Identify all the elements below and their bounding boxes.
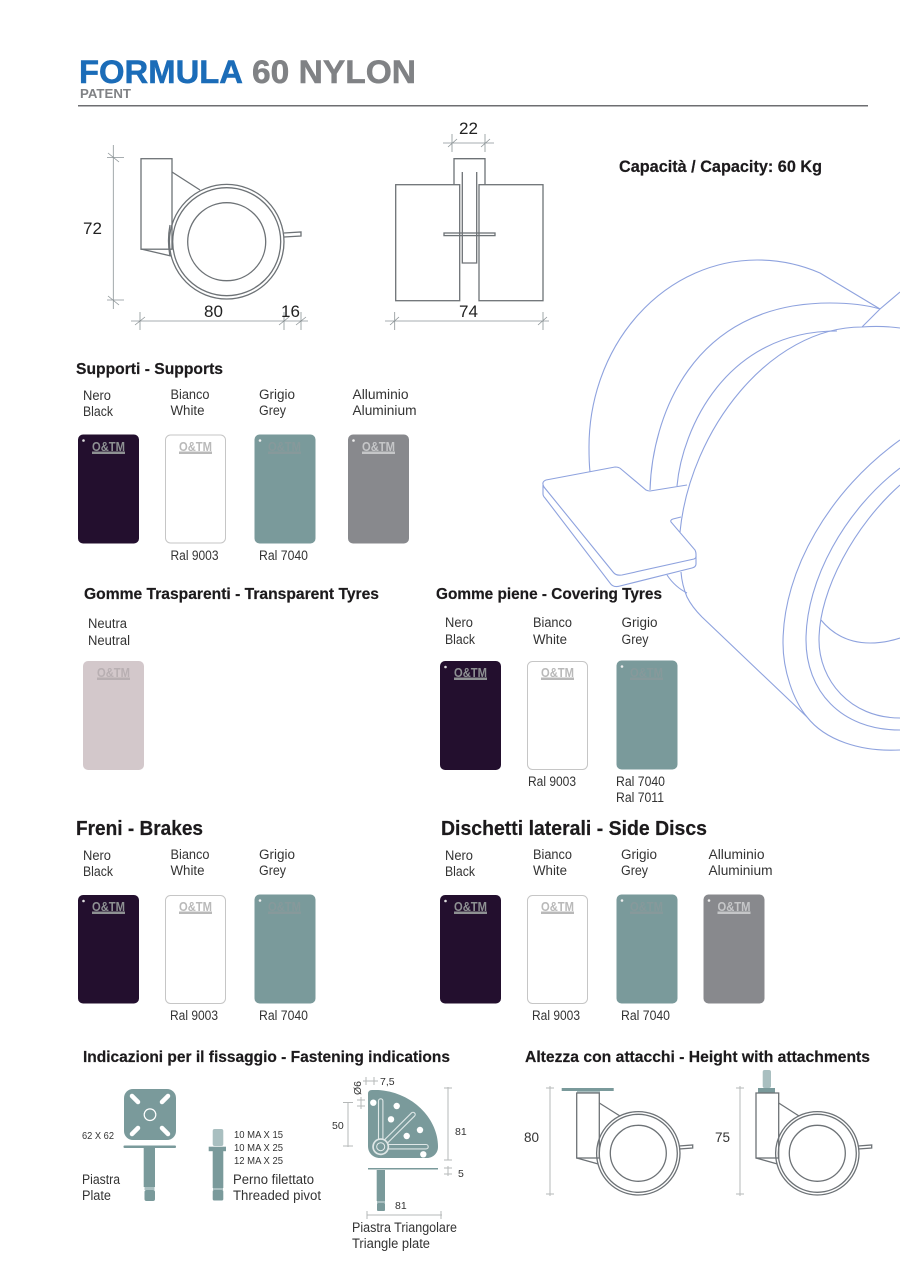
- swatch: discs grey: O&TM: [630, 900, 663, 914]
- swatch: discs aluminium: O&TM: [718, 900, 750, 914]
- ral codes: brakes: Ral 9003: [170, 1008, 218, 1023]
- colour labels: brakes: Black: [83, 864, 113, 879]
- swatch: supports aluminium: O&TM: [362, 440, 395, 454]
- colour labels: supports: Nero: [83, 388, 111, 403]
- swatch: supports white: [166, 435, 226, 543]
- colour labels: supports: [83, 387, 416, 419]
- heading: height with attachments: Altezza con attacchi - Height with attachments: [525, 1049, 870, 1066]
- colour labels: brakes: White: [170, 863, 204, 878]
- swatch: brakes grey: O&TM: [268, 900, 301, 914]
- colour labels: brakes: Bianco: [170, 847, 210, 862]
- swatch: brakes black: [78, 895, 139, 1004]
- colour labels: covering tyres: White: [533, 632, 567, 647]
- fastening: square plate: 62 X 62: [82, 1130, 114, 1142]
- title: PATENT: [80, 86, 131, 101]
- caster with threaded pivot, height 75: 75: [715, 1130, 730, 1145]
- colour labels: supports: Alluminio: [352, 387, 408, 402]
- colour labels: side discs: [445, 847, 772, 879]
- capacity text: Capacità / Capacity: 60 Kg: [619, 157, 822, 176]
- ral codes: supports: Ral 7040: [259, 548, 308, 563]
- swatch: covering black: [440, 661, 501, 770]
- colour labels: brakes: Grigio: [259, 847, 295, 862]
- fastening: square plate: [82, 1089, 176, 1203]
- colour labels: brakes: [83, 847, 295, 879]
- fastening: triangle plate: 50: [332, 1120, 344, 1132]
- caster with threaded pivot, height 75: [715, 1070, 872, 1196]
- colour labels: supports: White: [170, 403, 204, 418]
- colour labels: brakes: Nero: [83, 848, 111, 863]
- title: FORMULA: [79, 54, 243, 90]
- colour label: neutral: Neutral: [88, 633, 130, 648]
- colour labels: covering tyres: Black: [445, 632, 475, 647]
- diagram: front view with dimensions: 22: [459, 119, 478, 138]
- fastening: threaded pivot: 12 MA X 25: [234, 1155, 283, 1167]
- ral codes: side discs: [532, 1008, 670, 1023]
- fastening: triangle plate: Ø6: [352, 1081, 364, 1095]
- fastening: square plate: Plate: [82, 1188, 111, 1203]
- swatch: covering white: O&TM: [541, 666, 574, 680]
- fastening: triangle plate: Piastra Triangolare: [352, 1220, 457, 1235]
- colour labels: side discs: Aluminium: [708, 863, 772, 878]
- ral codes: brakes: Ral 7040: [259, 1008, 308, 1023]
- swatch: discs aluminium: [704, 894, 764, 1004]
- swatch: discs black: [440, 895, 501, 1004]
- diagram: front view with dimensions: [385, 119, 549, 330]
- colour labels: side discs: Alluminio: [708, 847, 764, 862]
- swatch: supports grey: O&TM: [268, 440, 301, 454]
- colour labels: supports: Aluminium: [352, 403, 416, 418]
- colour labels: covering tyres: Grigio: [622, 615, 658, 630]
- title: 60 NYLON: [252, 54, 416, 90]
- swatch: covering grey: O&TM: [630, 666, 663, 680]
- colour labels: supports: Black: [83, 404, 113, 419]
- fastening: threaded pivot: Perno filettato: [233, 1172, 314, 1187]
- heading: supports: Supporti - Supports: [76, 361, 223, 378]
- swatch: covering grey: [616, 660, 678, 770]
- caster with plate, height 80: [524, 1086, 693, 1196]
- ral codes: covering tyres: [528, 774, 665, 805]
- ral codes: supports: [170, 548, 308, 563]
- swatch: supports aluminium: [348, 434, 409, 544]
- swatch: brakes black: O&TM: [92, 900, 125, 914]
- colour labels: supports: Grey: [259, 403, 286, 418]
- colour labels: supports: Bianco: [170, 387, 210, 402]
- colour labels: supports: Grigio: [259, 387, 295, 402]
- colour labels: side discs: White: [533, 863, 567, 878]
- colour labels: covering tyres: [445, 615, 658, 647]
- colour labels: side discs: Black: [445, 864, 475, 879]
- diagram: side view with dimensions: 16: [281, 302, 300, 321]
- colour label: neutral: [88, 616, 130, 648]
- fastening: threaded pivot: 10 MA X 15: [234, 1129, 283, 1141]
- swatch: supports black: O&TM: [92, 440, 125, 454]
- ral codes: brakes: [170, 1008, 308, 1023]
- ral codes: supports: Ral 9003: [170, 548, 218, 563]
- fastening: triangle plate: Triangle plate: [352, 1236, 430, 1251]
- colour label: neutral: Neutra: [88, 616, 127, 631]
- diagram: front view with dimensions: 74: [459, 302, 478, 321]
- colour labels: covering tyres: Nero: [445, 615, 473, 630]
- swatch: neutral tyre: O&TM: [97, 666, 130, 680]
- fastening: threaded pivot: [209, 1129, 321, 1203]
- ral codes: side discs: Ral 7040: [621, 1008, 670, 1023]
- fastening: triangle plate: [332, 1076, 467, 1251]
- colour labels: side discs: Grigio: [621, 847, 657, 862]
- swatch: discs white: [528, 896, 588, 1004]
- colour labels: side discs: Nero: [445, 848, 473, 863]
- swatch: discs black: O&TM: [454, 900, 487, 914]
- fastening: square plate: Piastra: [82, 1172, 120, 1187]
- title: [79, 54, 416, 101]
- fastening: triangle plate: 7,5: [380, 1076, 395, 1088]
- ral codes: covering tyres: Ral 7040: [616, 774, 665, 789]
- colour labels: covering tyres: Bianco: [533, 615, 572, 630]
- caster with plate, height 80: 80: [524, 1130, 539, 1145]
- heading: transparent tyres: Gomme Trasparenti - Transparent Tyres: [84, 586, 379, 603]
- diagram: side view with dimensions: 80: [204, 302, 223, 321]
- heading: fastening indications: Indicazioni per il fissaggio - Fastening indications: [83, 1049, 450, 1066]
- swatch: supports grey: [254, 434, 316, 544]
- colour labels: brakes: Grey: [259, 863, 286, 878]
- swatch: covering black: O&TM: [454, 666, 487, 680]
- swatch: discs white: O&TM: [541, 900, 574, 914]
- fastening: threaded pivot: Threaded pivot: [233, 1188, 321, 1203]
- swatch: neutral tyre: [83, 661, 144, 770]
- diagram: side view with dimensions: [83, 145, 308, 330]
- colour labels: covering tyres: Grey: [622, 632, 649, 647]
- heading: side discs: Dischetti laterali - Side Discs: [441, 818, 707, 840]
- swatch: brakes white: [166, 896, 226, 1004]
- fastening: triangle plate: 81: [395, 1200, 407, 1212]
- swatch: brakes grey: [254, 894, 316, 1004]
- fastening: triangle plate: 81: [455, 1126, 467, 1138]
- colour labels: side discs: Bianco: [533, 847, 572, 862]
- diagram: side view with dimensions: 72: [83, 219, 102, 238]
- fastening: triangle plate: 5: [458, 1168, 464, 1180]
- swatch: supports white: O&TM: [179, 440, 212, 454]
- swatch: discs grey: [616, 894, 678, 1004]
- swatch: supports black: [78, 434, 139, 544]
- ral codes: covering tyres: Ral 9003: [528, 774, 576, 789]
- ral codes: side discs: Ral 9003: [532, 1008, 580, 1023]
- colour labels: side discs: Grey: [621, 863, 648, 878]
- swatch: brakes white: O&TM: [179, 900, 212, 914]
- swatch: covering white: [528, 662, 588, 770]
- heading: brakes: Freni - Brakes: [76, 818, 203, 840]
- heading: covering tyres: Gomme piene - Covering Tyres: [436, 586, 662, 603]
- fastening: threaded pivot: 10 MA X 25: [234, 1142, 283, 1154]
- ral codes: covering tyres: Ral 7011: [616, 790, 664, 805]
- illustration: large caster wheel outline: [543, 260, 900, 750]
